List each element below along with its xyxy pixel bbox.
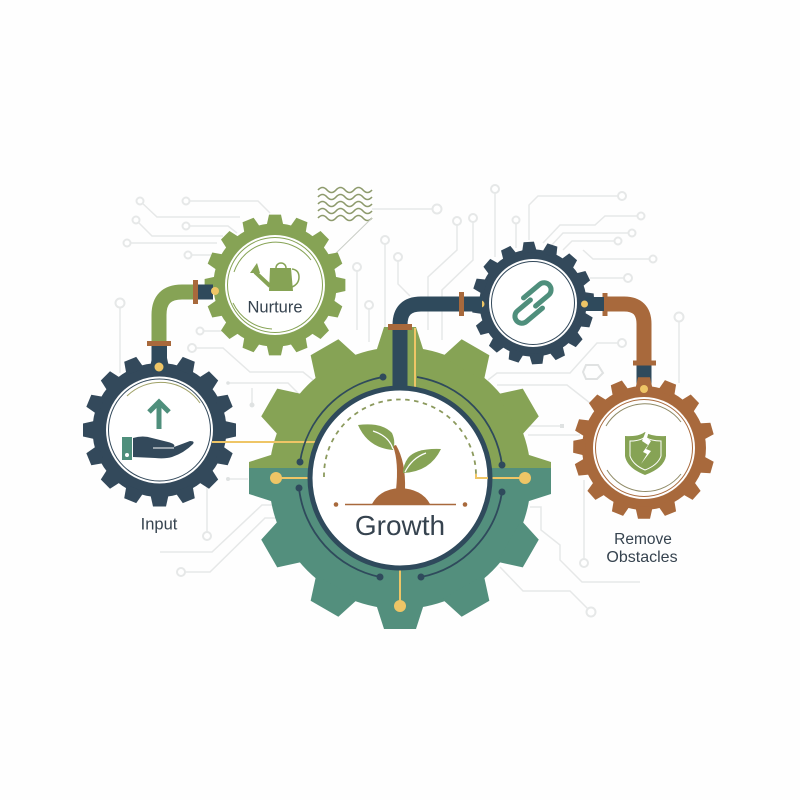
arc end dots [296, 374, 506, 580]
pipe flanges [388, 292, 464, 330]
icon: sprout [334, 424, 467, 507]
label: nurture: Nurture [247, 298, 303, 316]
connector dot: nurture [211, 287, 219, 295]
label: remove obstacles: Remove [614, 531, 672, 548]
yellow connectors [212, 328, 525, 606]
gear body: input [83, 354, 236, 506]
pipe stub: nurture [198, 284, 213, 300]
icon: chain link [508, 280, 558, 326]
pipe: input to nurture [147, 280, 198, 372]
connector dot: input [154, 362, 164, 372]
gear body: green top half [249, 327, 551, 468]
pipe: growth to link gear [400, 304, 482, 392]
icon: open hand [122, 436, 194, 460]
pipe stub: link right [585, 297, 604, 311]
gear body: link [468, 238, 598, 368]
gear body: teal bottom half [249, 468, 551, 629]
label: input: Input [141, 516, 178, 534]
gear body: remove obstacles [573, 377, 714, 519]
icon: broken shield [625, 431, 666, 475]
icon: watering can [250, 263, 299, 291]
connector dots [270, 472, 531, 612]
panel: nurture gear [198, 215, 345, 355]
icon: wave lines with pointer [318, 188, 372, 257]
central dark ring [310, 388, 490, 568]
icon: hexagon outline [583, 365, 603, 379]
connector dot: remove obstacles [640, 385, 648, 393]
gear body: nurture [205, 215, 345, 355]
label: growth: Growth [355, 510, 445, 541]
pipe stub: input [152, 346, 167, 372]
panel: remove obstacles gear [573, 377, 714, 519]
dashed arc [324, 399, 476, 477]
panel: growth gear [212, 292, 551, 629]
connector dots: link [478, 300, 588, 308]
panel: link gear [468, 238, 604, 368]
label: obstacles: Obstacles [606, 549, 678, 566]
yellow connector in center [476, 474, 488, 478]
dark arcs [299, 377, 502, 577]
icon: up arrow [149, 402, 169, 429]
pipe: link gear to remove obstacles [602, 293, 656, 386]
panel: input gear [83, 346, 236, 506]
circuit traces background [116, 185, 684, 616]
